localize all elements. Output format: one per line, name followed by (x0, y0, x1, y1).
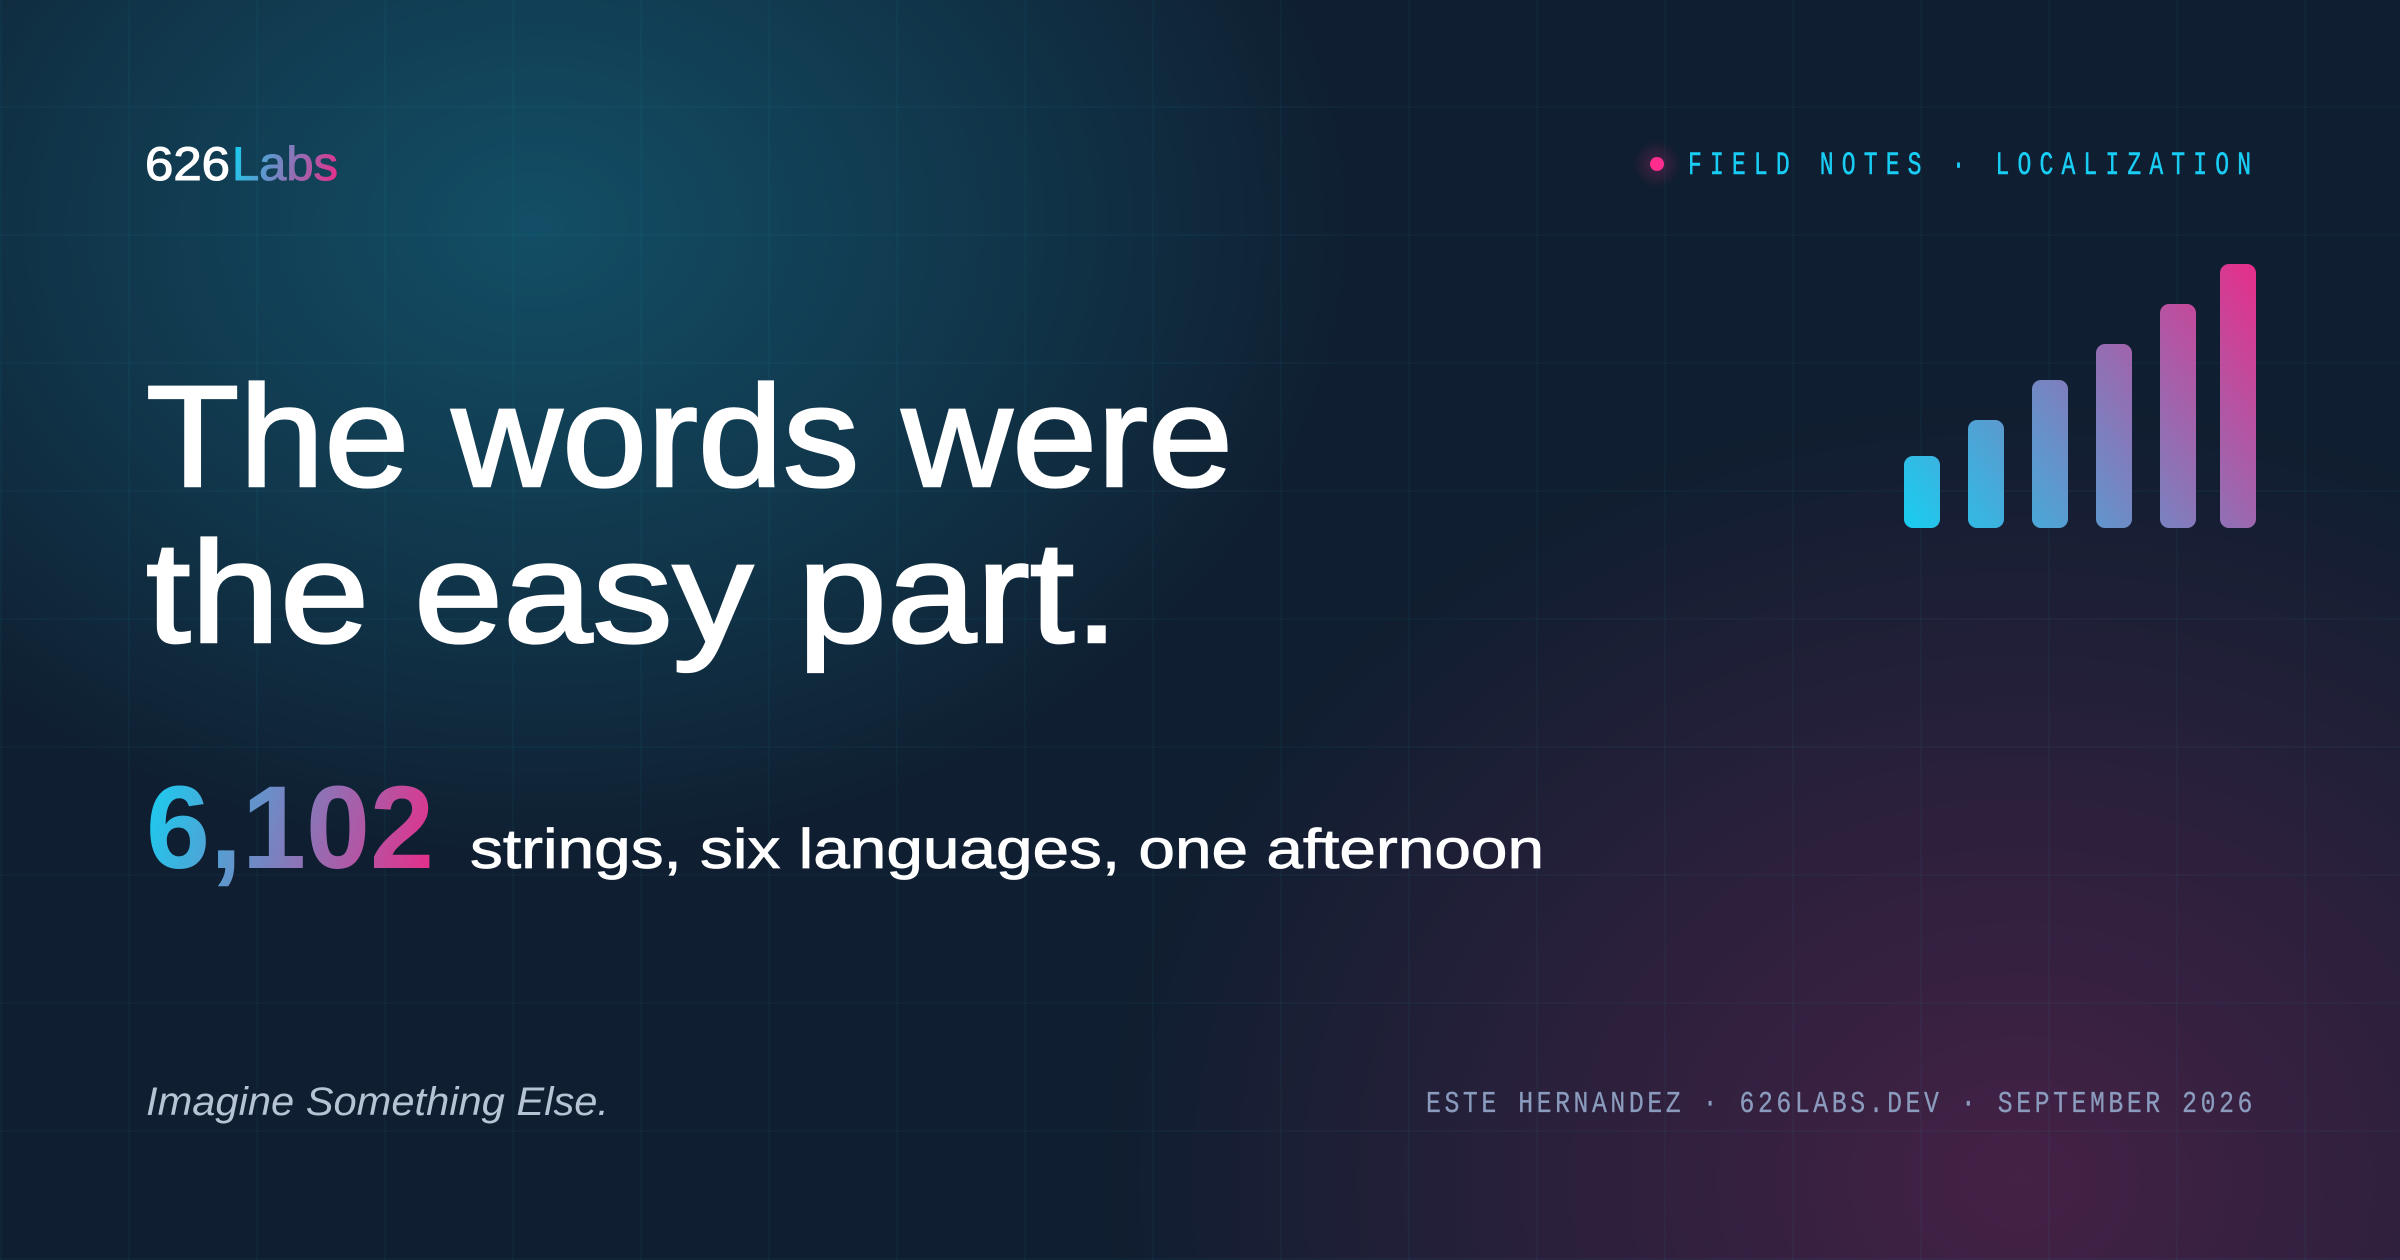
eyebrow: field notes tag (1633, 140, 2251, 188)
logo: 626Labs: 626 (145, 137, 230, 190)
stat caption: strings, six languages, one afternoon (470, 817, 1544, 880)
bar chart: rising gradient bars (1904, 264, 2256, 528)
logo: 626Labs (145, 137, 338, 190)
eyebrow: field notes tag: FIELD NOTES · LOCALIZATION (1688, 149, 2251, 184)
big number: 6,102: 6,102 (146, 762, 434, 894)
tagline: Imagine Something Else. (146, 1080, 609, 1124)
footer credits: ESTE HERNANDEZ · 626LABS.DEV · SEPTEMBER 2026 (1426, 1088, 2252, 1122)
headline: The words were (146, 356, 1233, 517)
headline: the easy part. (146, 512, 1119, 673)
logo: 626Labs: Labs (232, 137, 338, 190)
headline (146, 356, 1233, 673)
